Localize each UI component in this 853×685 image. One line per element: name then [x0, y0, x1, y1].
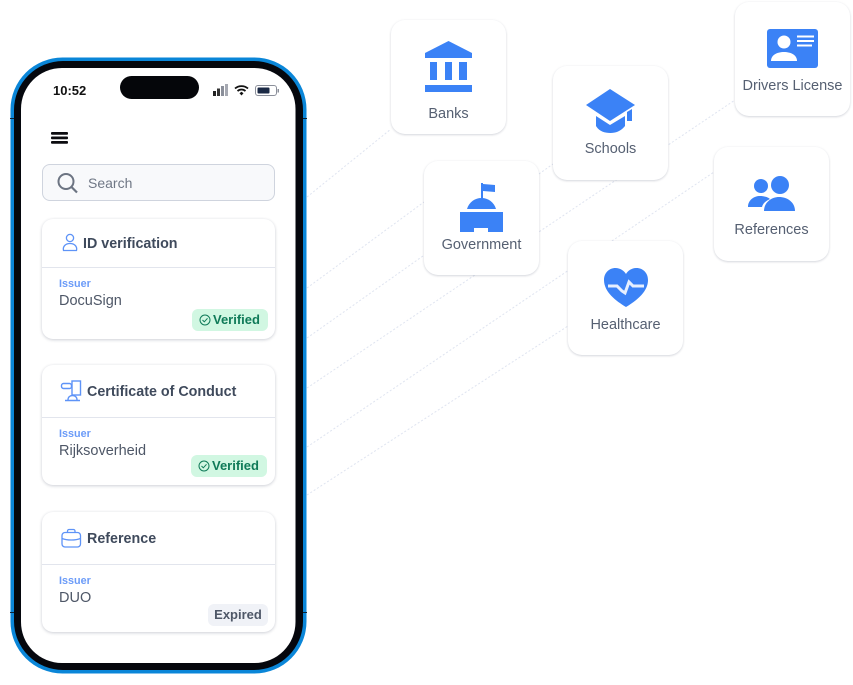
badge: expired — [208, 604, 268, 626]
icon: hamburger menu — [51, 132, 68, 144]
issuer value: DUO — [59, 590, 91, 606]
issuer value: Rijksoverheid — [59, 443, 146, 459]
card: ID verification — [42, 219, 275, 339]
icon: people — [748, 176, 795, 211]
card: Reference — [42, 512, 275, 632]
icon: bank — [425, 41, 472, 92]
icon: briefcase — [61, 528, 82, 548]
icon: government building — [460, 183, 503, 232]
tile: Banks — [391, 20, 506, 134]
label: Healthcare — [590, 317, 661, 333]
icon: search — [58, 173, 78, 194]
card title: Reference — [87, 531, 156, 547]
card title: Certificate of Conduct — [87, 384, 236, 400]
badge: verified — [192, 309, 268, 331]
issuer value: DocuSign — [59, 293, 122, 309]
badge: verified: Verified — [212, 458, 259, 473]
phone — [10, 58, 307, 674]
badge: verified: Verified — [213, 312, 260, 327]
card: Certificate of Conduct — [42, 365, 275, 485]
issuer label: Issuer — [59, 575, 91, 587]
status bar time: 10:52 — [53, 83, 86, 98]
badge: verified — [191, 455, 267, 477]
label: Government — [442, 237, 521, 253]
tile: References — [714, 147, 829, 261]
icon: heart with pulse — [604, 268, 648, 307]
label: Schools — [585, 141, 636, 157]
tile: Schools — [553, 66, 668, 180]
card title: ID verification — [83, 236, 178, 252]
tile: Healthcare — [568, 241, 683, 355]
label: Drivers License — [743, 78, 842, 94]
icon: person — [62, 234, 78, 252]
dynamic island — [120, 76, 199, 99]
label: References — [734, 222, 809, 238]
tile: Government — [424, 161, 539, 275]
search box — [42, 164, 275, 201]
status icons — [213, 84, 279, 96]
issuer label: Issuer — [59, 278, 91, 290]
badge: expired: Expired — [214, 607, 262, 622]
label: Banks — [428, 106, 469, 122]
phone frame — [10, 58, 307, 674]
icon: gavel — [60, 380, 82, 402]
icon: graduation cap — [586, 89, 635, 133]
search placeholder: Search — [88, 175, 132, 191]
tile: Drivers License — [735, 2, 850, 116]
icon: license card — [767, 29, 818, 68]
issuer label: Issuer — [59, 428, 91, 440]
